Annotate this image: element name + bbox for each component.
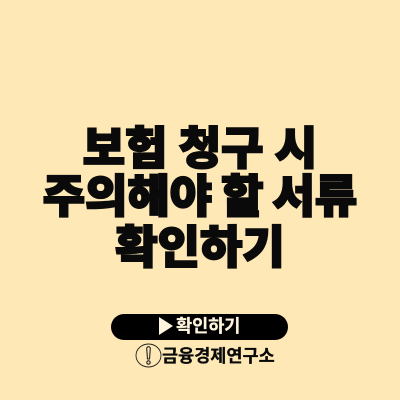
title	[43, 123, 357, 273]
button label: 확인하기	[176, 316, 240, 336]
title: 주의해야 할 서류	[43, 171, 357, 222]
icon: exclamation circle	[136, 344, 162, 368]
title: 확인하기	[115, 222, 285, 273]
title: 보험 청구 시	[83, 123, 317, 174]
icon: play triangle	[159, 317, 173, 335]
brand name: 금융경제연구소	[162, 346, 275, 366]
button: confirm	[111, 314, 288, 340]
brand: source	[136, 344, 275, 368]
